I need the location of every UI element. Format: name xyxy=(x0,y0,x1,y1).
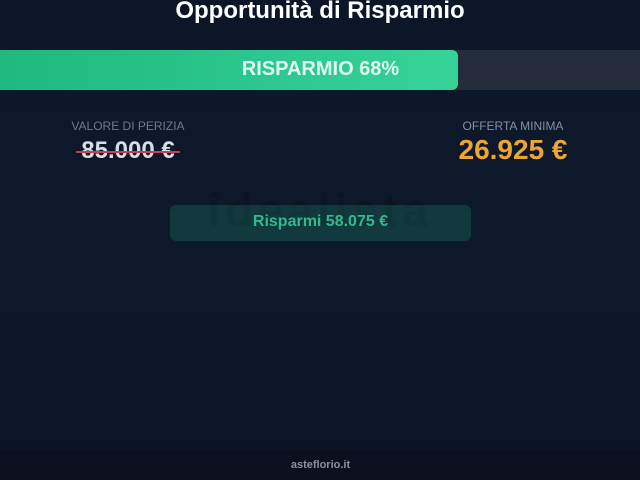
value: 26.925 € xyxy=(458,134,568,165)
savings text: Risparmi 58.075 € xyxy=(253,213,388,230)
footer text: asteflorio.it xyxy=(291,459,350,471)
stat: offerta minima xyxy=(458,119,568,165)
label: OFFERTA MINIMA xyxy=(463,119,563,133)
footer xyxy=(0,450,640,480)
stat: valore di perizia xyxy=(71,119,185,164)
strikethrough xyxy=(76,151,180,153)
progress bar xyxy=(0,50,640,90)
struck-through value: 85.000 € xyxy=(81,137,175,164)
label: VALORE DI PERIZIA xyxy=(71,119,185,133)
progress label: RISPARMIO 68% xyxy=(242,58,399,80)
progress fill xyxy=(0,50,458,90)
watermark: idealista xyxy=(208,184,432,236)
savings callout xyxy=(170,205,471,241)
